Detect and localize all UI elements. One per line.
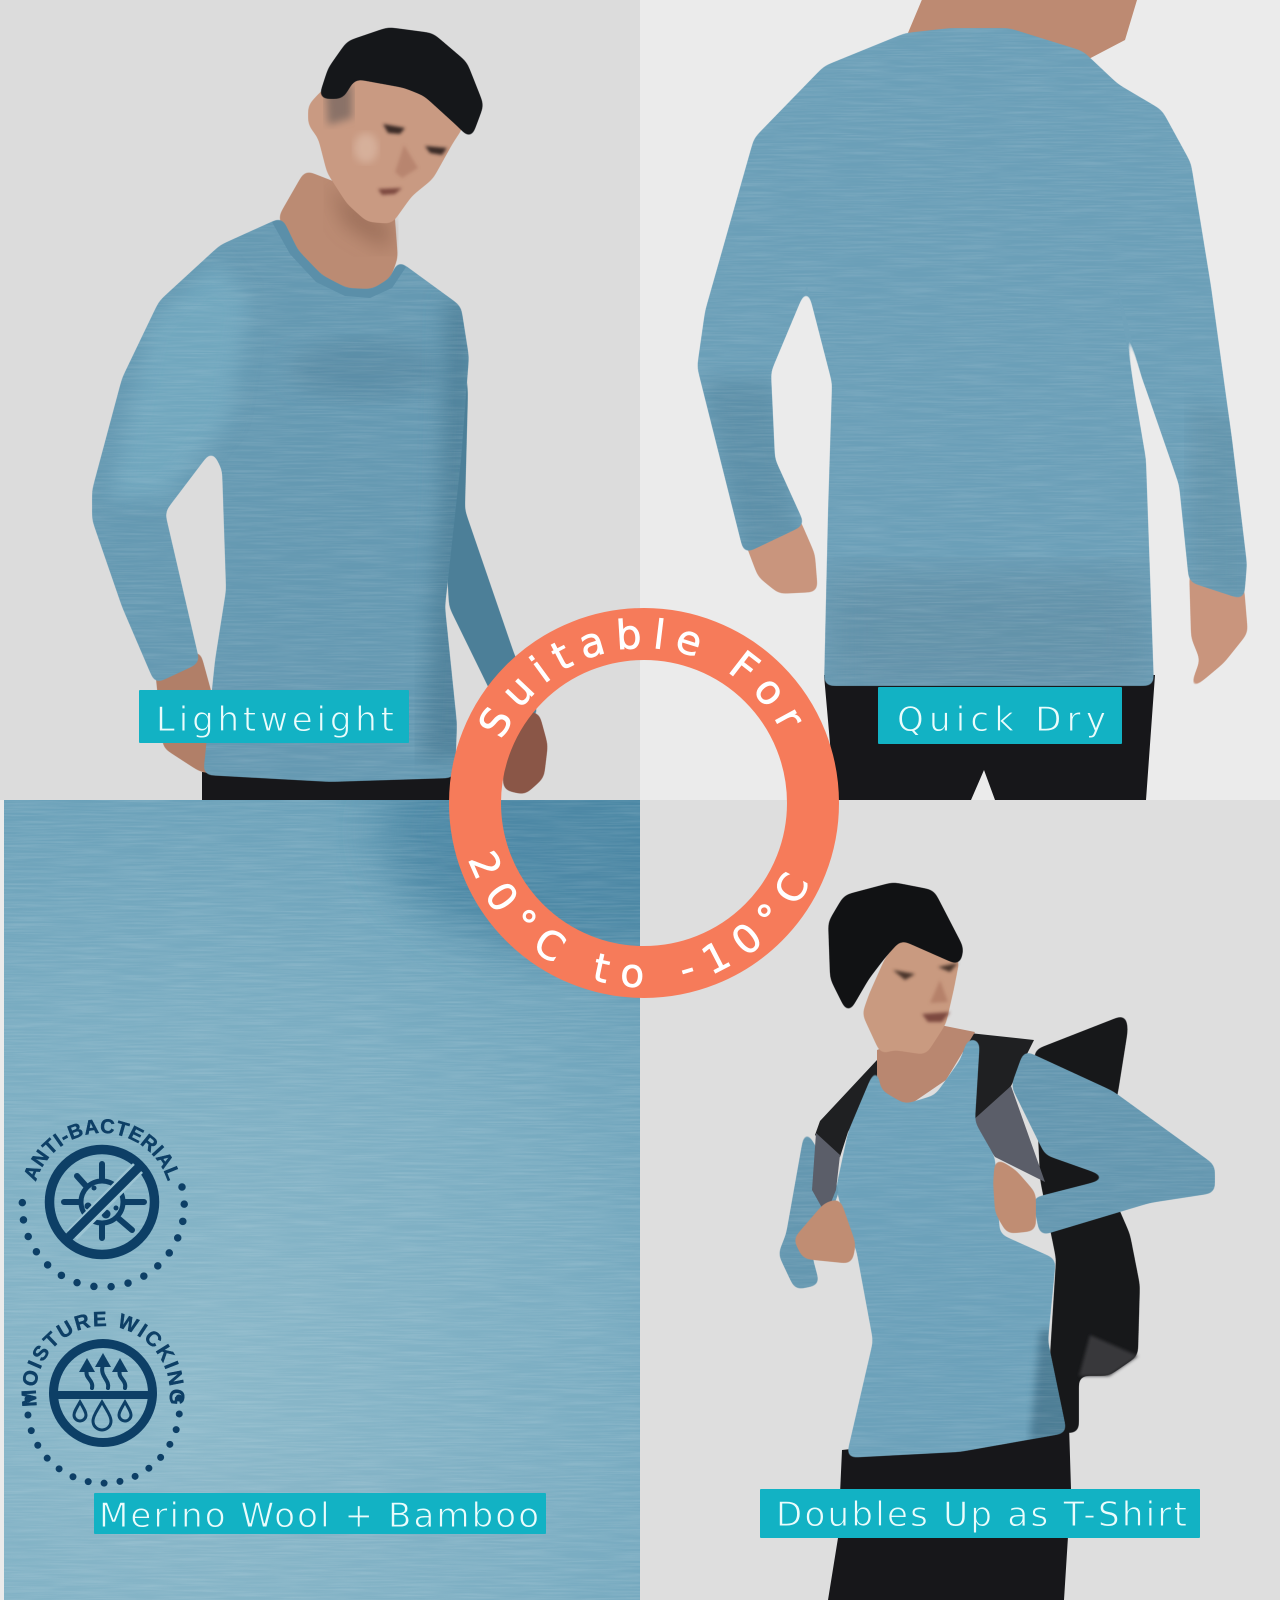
rising arrows: [79, 1353, 128, 1372]
hand right: [993, 1157, 1036, 1234]
shirt shading and texture: [80, 200, 480, 790]
prohibition sign: [50, 1150, 154, 1254]
backpack grey panel left: [812, 1133, 840, 1215]
ring text top: Suitable For: [480, 618, 802, 738]
pants: [202, 772, 458, 800]
panel: model back view: [690, 0, 1260, 800]
beanie: [828, 882, 964, 1015]
shirt: [92, 220, 469, 782]
fabric texture: [4, 800, 640, 1600]
icon: moisture wicking: [21, 1312, 184, 1487]
dotted arc: [22, 1187, 184, 1287]
facial features: [378, 124, 447, 195]
cheek shine: [354, 133, 378, 163]
fabric base: [4, 800, 640, 1600]
face: [862, 938, 960, 1055]
icon: anti-bacterial: [18, 1119, 188, 1290]
panel: background top-right: [640, 0, 1280, 800]
virus spots: [84, 1186, 118, 1218]
shirt shading and texture: [690, 20, 1260, 700]
backpack grey panel right: [971, 1086, 1045, 1182]
backpack right strap: [960, 1032, 1034, 1125]
neck: [278, 170, 398, 295]
shirt torso: [837, 1040, 1066, 1458]
shirt texture: [838, 1040, 1066, 1458]
label: Doubles Up as T-Shirt: Doubles Up as T-Shirt: [776, 1495, 1187, 1535]
hand left: [744, 515, 818, 594]
shirt sleeves: [780, 1053, 1215, 1288]
hair: [318, 27, 484, 140]
virus: [64, 1164, 144, 1238]
hand left: [155, 650, 229, 776]
dotted arc: [28, 1398, 180, 1483]
panel: model front view: [80, 27, 548, 800]
back arm: [440, 357, 539, 724]
backpack body: [1034, 1014, 1140, 1433]
backpack base: [1079, 1335, 1138, 1376]
panel: background bottom-left strip: [0, 800, 4, 1600]
label: Lightweight: [139, 690, 409, 743]
backpack left strap: [815, 1060, 880, 1157]
panel: model with backpack: [775, 882, 1220, 1600]
circle with divider: [54, 1344, 152, 1442]
pants: [828, 1425, 1071, 1600]
label: Lightweight: Lightweight: [156, 700, 394, 740]
facial features: [893, 963, 958, 1022]
side fade: [326, 84, 352, 125]
ring text bottom: 20°C to -10°C: [468, 850, 808, 988]
anti-bacterial caption: ANTI-BACTERIAL: [24, 1119, 178, 1182]
jaw shadow: [330, 185, 392, 250]
label: Merino Wool + Bamboo: Merino Wool + Bamboo: [99, 1496, 539, 1536]
hand left: [793, 1198, 856, 1264]
water drops: [74, 1402, 131, 1430]
pants: [824, 675, 1155, 800]
label: Quick Dry: Quick Dry: [897, 700, 1106, 740]
hand right: [1187, 570, 1248, 694]
ring: [475, 634, 813, 972]
arrow stems: [86, 1365, 125, 1388]
fabric shade near centre: [366, 800, 640, 970]
panel: fabric close-up: [4, 800, 640, 1600]
badge: Suitable For 20°C to -10°C ring: [449, 608, 839, 998]
sleeve texture: [780, 1053, 1214, 1288]
moisture wicking caption: MOISTURE WICKING: [21, 1312, 184, 1406]
shirt: [690, 20, 1260, 700]
neck: [877, 1025, 975, 1108]
face: [308, 70, 465, 224]
panel: background top-left: [0, 0, 640, 800]
panel: background bottom-right: [640, 800, 1280, 1600]
neck: [905, 0, 1140, 62]
slash: [72, 1168, 138, 1235]
hand right: [503, 712, 548, 795]
label: Quick Dry: [878, 687, 1122, 744]
